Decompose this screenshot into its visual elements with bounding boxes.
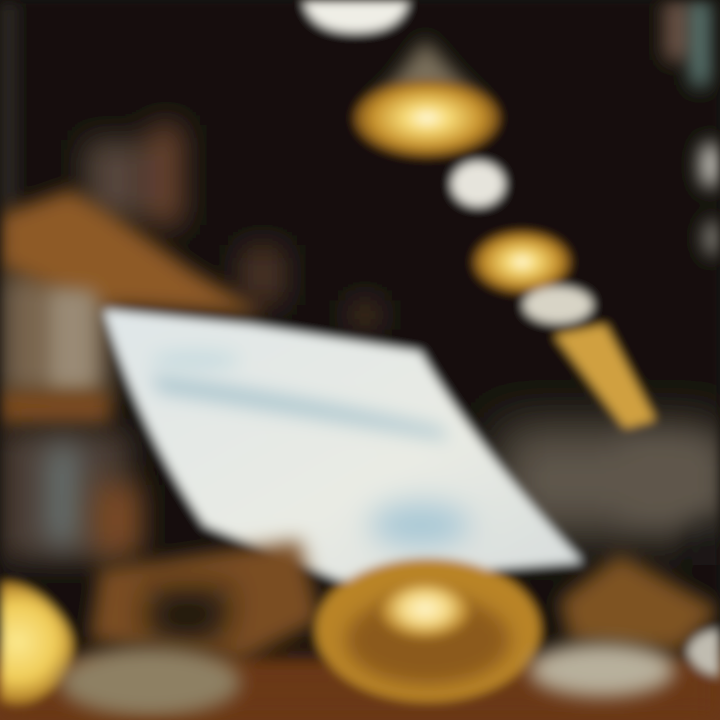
lamp: small white globe xyxy=(452,162,504,206)
lamp: gold pendant xyxy=(355,40,499,156)
coin: bottom-left glowing xyxy=(0,583,72,704)
table: warm wooden foreground xyxy=(0,540,720,720)
coin: pale bottom-left xyxy=(60,648,240,716)
lamp: top white globe xyxy=(304,0,408,32)
document: blurred paper sheet xyxy=(104,310,582,580)
lamp: stacked lights xyxy=(474,232,655,428)
background: dim bookshelf shapes xyxy=(85,125,380,330)
shelf: wooden ledge and books at left xyxy=(0,190,265,560)
coin: central gold xyxy=(316,558,540,702)
lights: right edge glows xyxy=(665,0,720,254)
coin: pale bottom-right xyxy=(530,630,720,696)
